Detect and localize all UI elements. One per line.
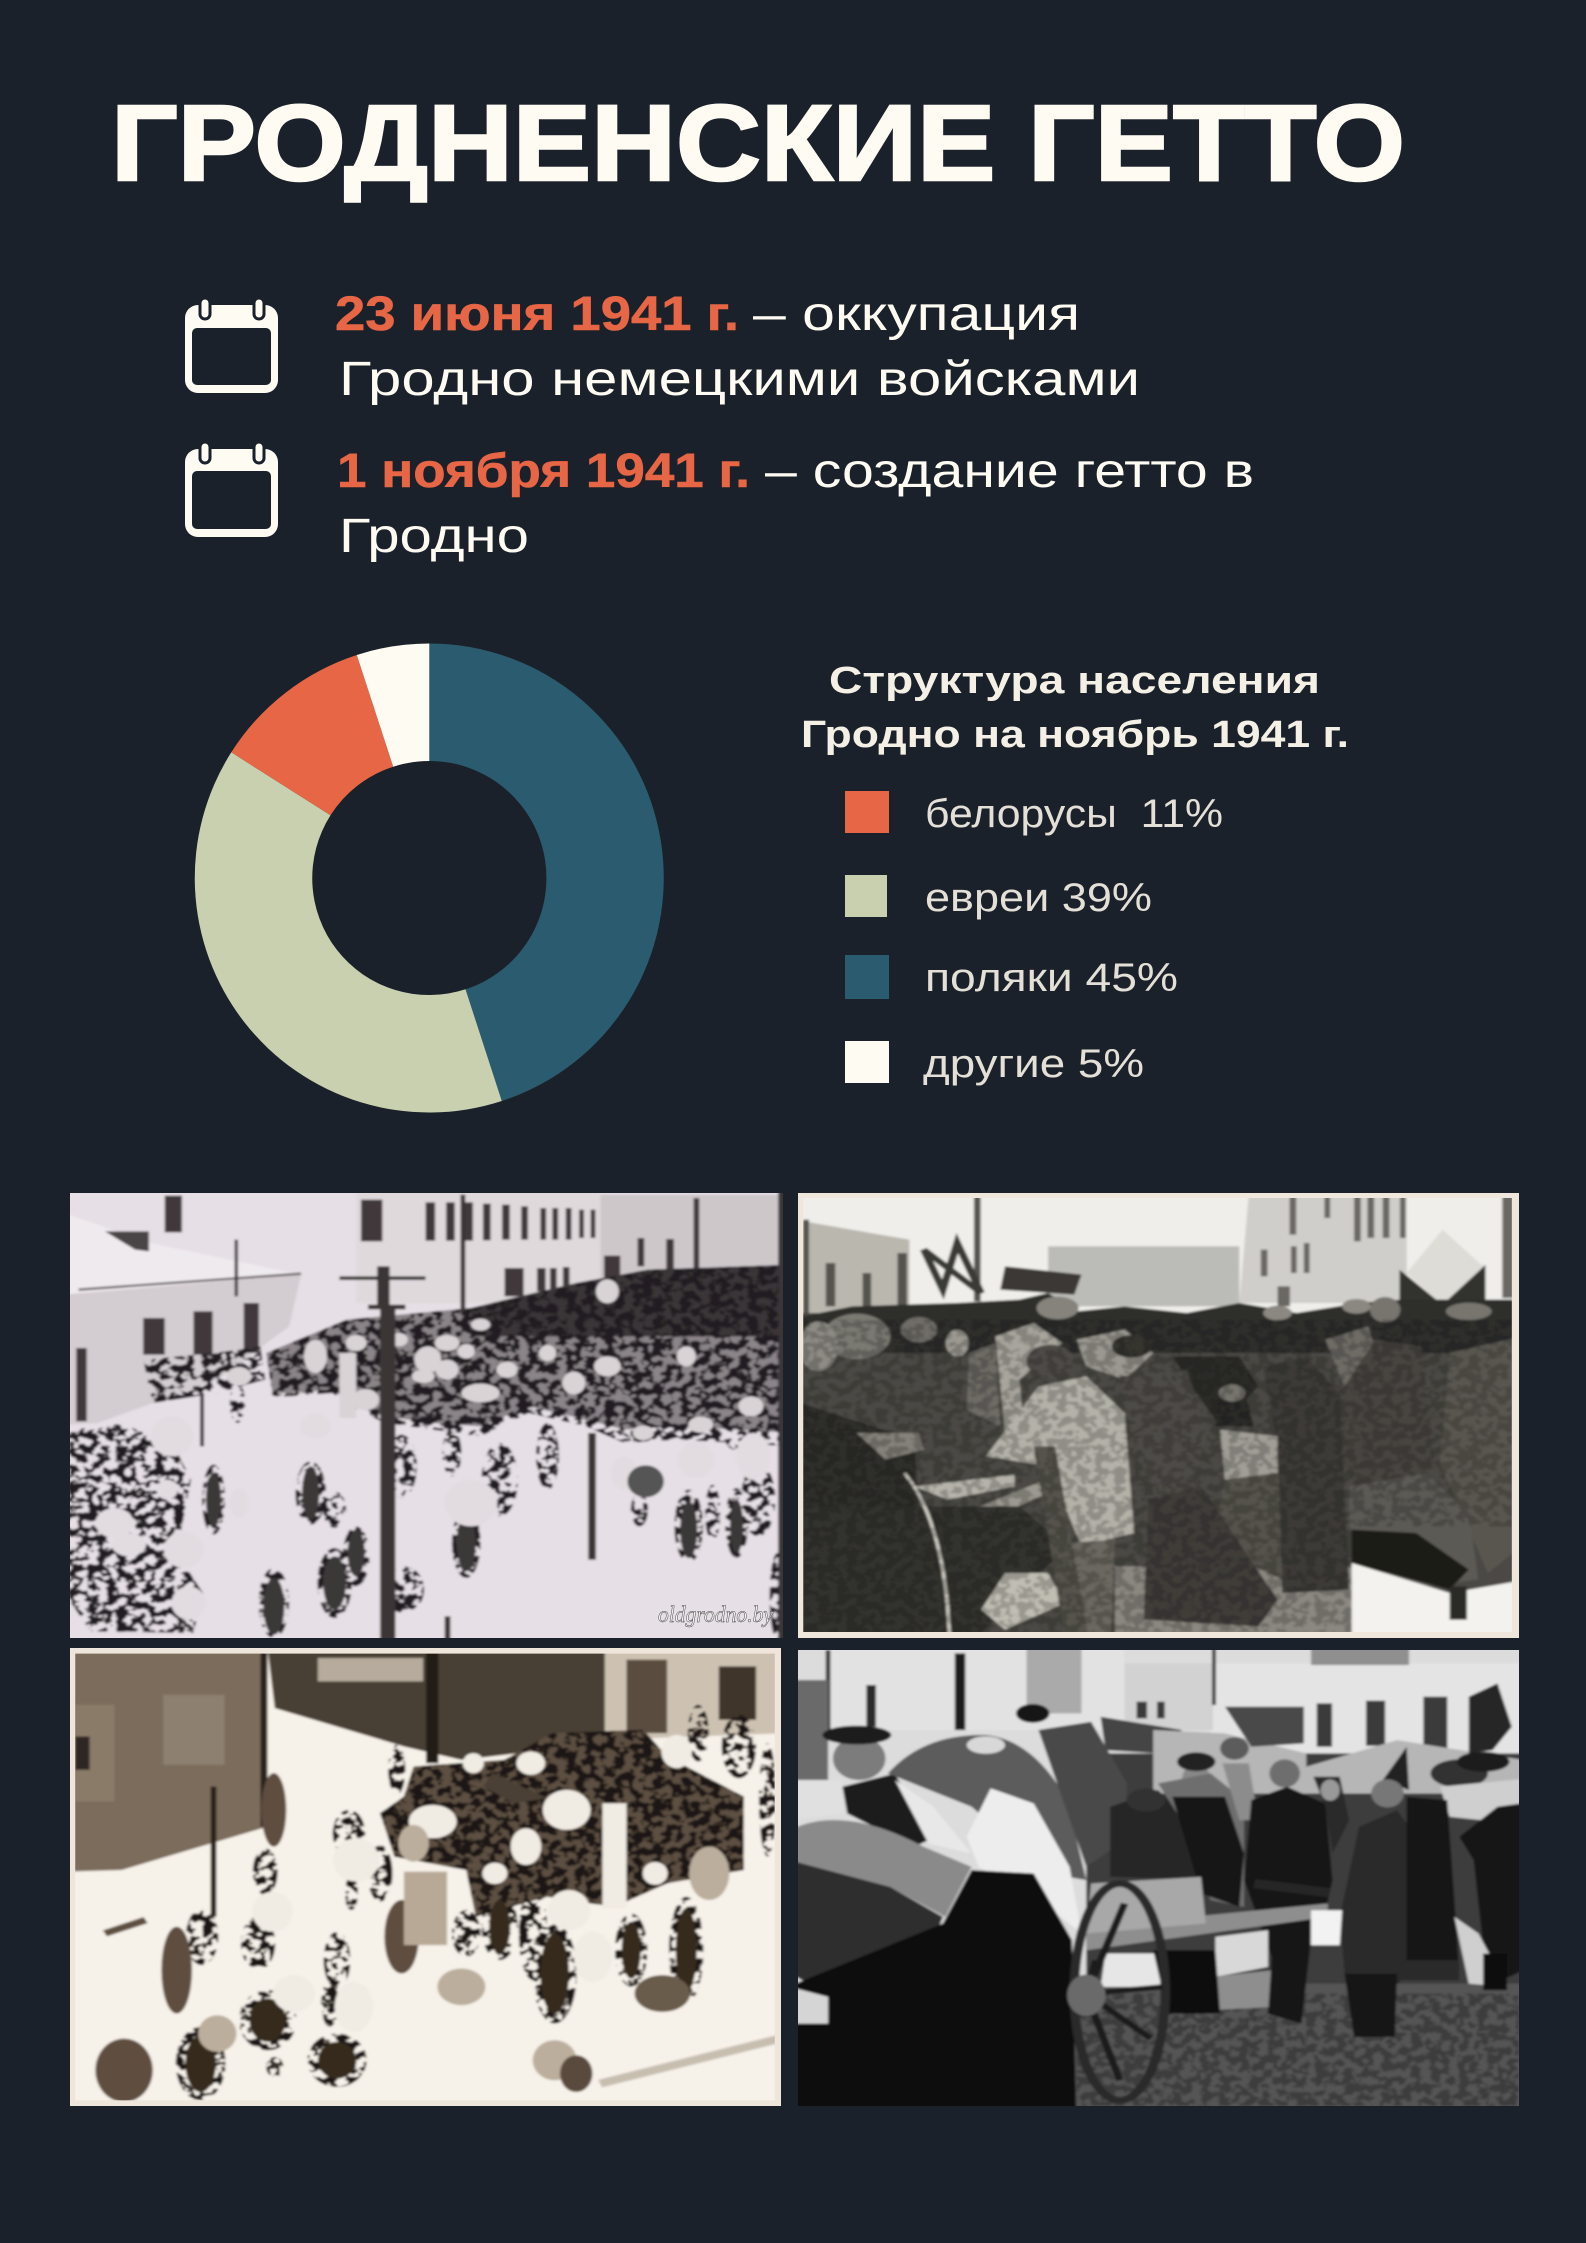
legend heading: Гродно на ноябрь 1941 г.	[801, 714, 1349, 756]
legend item: poles	[845, 955, 1178, 1000]
date line: occupation: Гродно немецкими войсками	[339, 353, 1140, 406]
photo: family with loaded cart	[798, 1650, 1519, 2106]
legend item: jews	[845, 875, 1152, 920]
legend item: others: другие 5%	[923, 1042, 1144, 1086]
legend item: poles: поляки 45%	[925, 956, 1178, 1000]
legend item: belarusians: белорусы 11%	[925, 792, 1223, 836]
photo: people with bundles on snow	[70, 1648, 781, 2106]
legend item: others	[845, 1041, 1144, 1086]
legend heading: Структура населения	[829, 660, 1320, 702]
date line: occupation	[335, 288, 1140, 406]
date line: ghetto creation: Гродно	[339, 510, 529, 563]
photo: crowd on snowy street	[40, 1173, 816, 1660]
icon: calendar 1	[185, 298, 278, 393]
donut chart	[195, 644, 664, 1113]
title: ГРОДНЕНСКИЕ ГЕТТО	[111, 82, 1405, 203]
date line: ghetto creation: 1 ноября 1941 г.	[337, 445, 750, 498]
watermark: oldgrodno.by	[658, 1602, 774, 1627]
photo: checkpoint with soldiers and cart	[798, 1193, 1519, 1638]
legend item: jews: евреи 39%	[925, 876, 1152, 920]
icon: calendar 2	[185, 442, 278, 537]
date line: ghetto creation: – создание гетто в	[765, 445, 1254, 498]
date line: ghetto creation	[337, 445, 1254, 563]
date line: occupation: – оккупация	[753, 288, 1080, 341]
legend heading	[801, 660, 1349, 756]
date line: occupation: 23 июня 1941 г.	[335, 288, 739, 341]
